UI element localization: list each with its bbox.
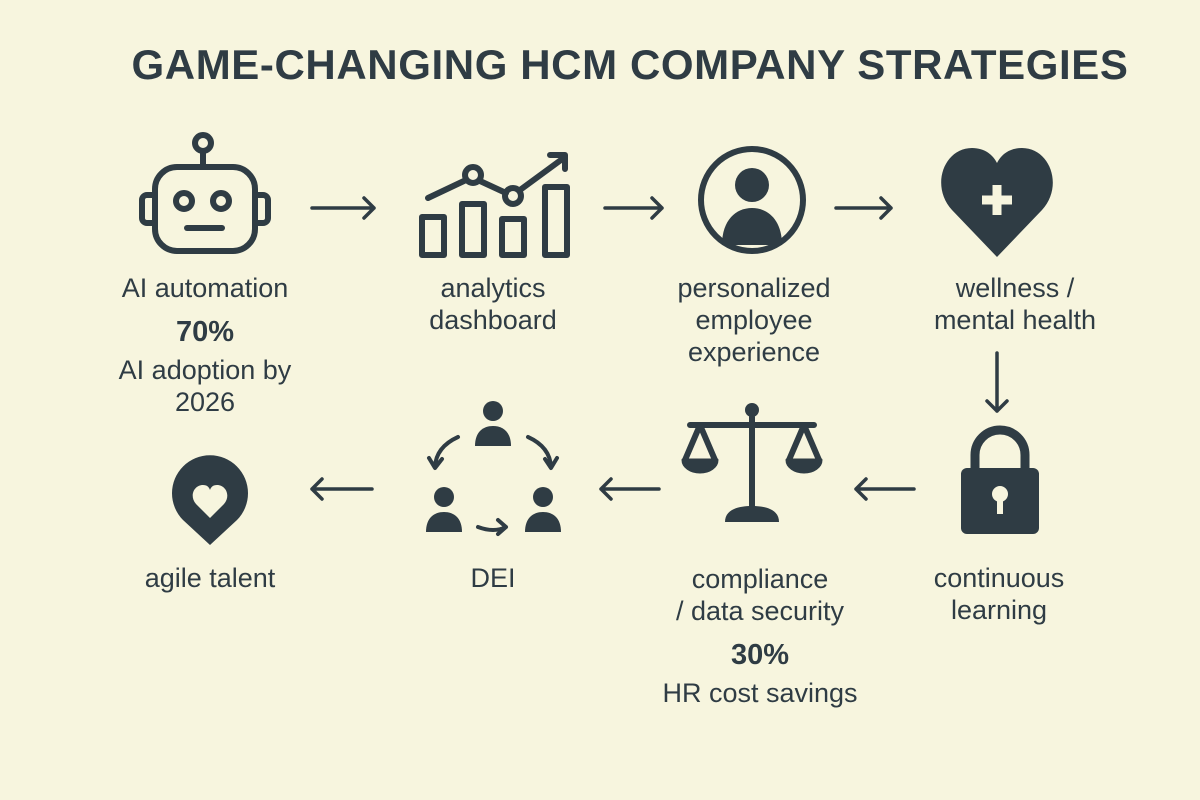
label: compliance xyxy=(662,564,858,708)
label: personalized employee experience: personalized xyxy=(677,273,831,303)
label: AI automation xyxy=(118,273,292,417)
label: AI automation: AI adoption by xyxy=(119,355,291,385)
label: personalized employee experience xyxy=(677,273,831,367)
arrow: down xyxy=(987,353,1007,411)
icon: heart pin xyxy=(172,455,248,545)
label: DEI: DEI xyxy=(470,563,516,593)
label: AI automation: AI automation xyxy=(122,273,288,303)
icon: person xyxy=(701,149,803,251)
arrows row 2 xyxy=(312,479,914,499)
label: analytics dashboard: dashboard xyxy=(429,305,557,335)
label: compliance: compliance xyxy=(692,564,828,594)
label: wellness xyxy=(934,273,1096,335)
label: analytics dashboard: analytics xyxy=(440,273,546,303)
label: wellness: wellness / xyxy=(956,273,1074,303)
icon: robot xyxy=(142,135,268,251)
icon: scale xyxy=(683,403,821,522)
label: AI automation: 70% xyxy=(176,316,234,348)
label: personalized employee experience: employee xyxy=(695,305,813,335)
label: wellness: mental health xyxy=(934,305,1096,335)
icon: lock xyxy=(961,430,1039,534)
icon: heart with cross xyxy=(941,148,1053,257)
label: personalized employee experience: experience xyxy=(688,337,820,367)
label: compliance: HR cost savings xyxy=(662,678,858,708)
label: compliance: / data security xyxy=(676,596,844,626)
label: analytics dashboard xyxy=(429,273,557,335)
icon: analytics chart xyxy=(422,155,567,255)
label: continuous learning: learning xyxy=(951,595,1047,625)
label: continuous learning: continuous xyxy=(934,563,1064,593)
icon: DEI cycle xyxy=(426,401,561,534)
arrows row 1 xyxy=(312,198,891,218)
title: GAME-CHANGING HCM COMPANY STRATEGIES xyxy=(132,41,1128,88)
label: compliance: 30% xyxy=(731,639,789,671)
label: agile talent: agile talent xyxy=(145,563,275,593)
label: continuous learning xyxy=(934,563,1064,625)
label: AI automation: 2026 xyxy=(175,387,235,417)
